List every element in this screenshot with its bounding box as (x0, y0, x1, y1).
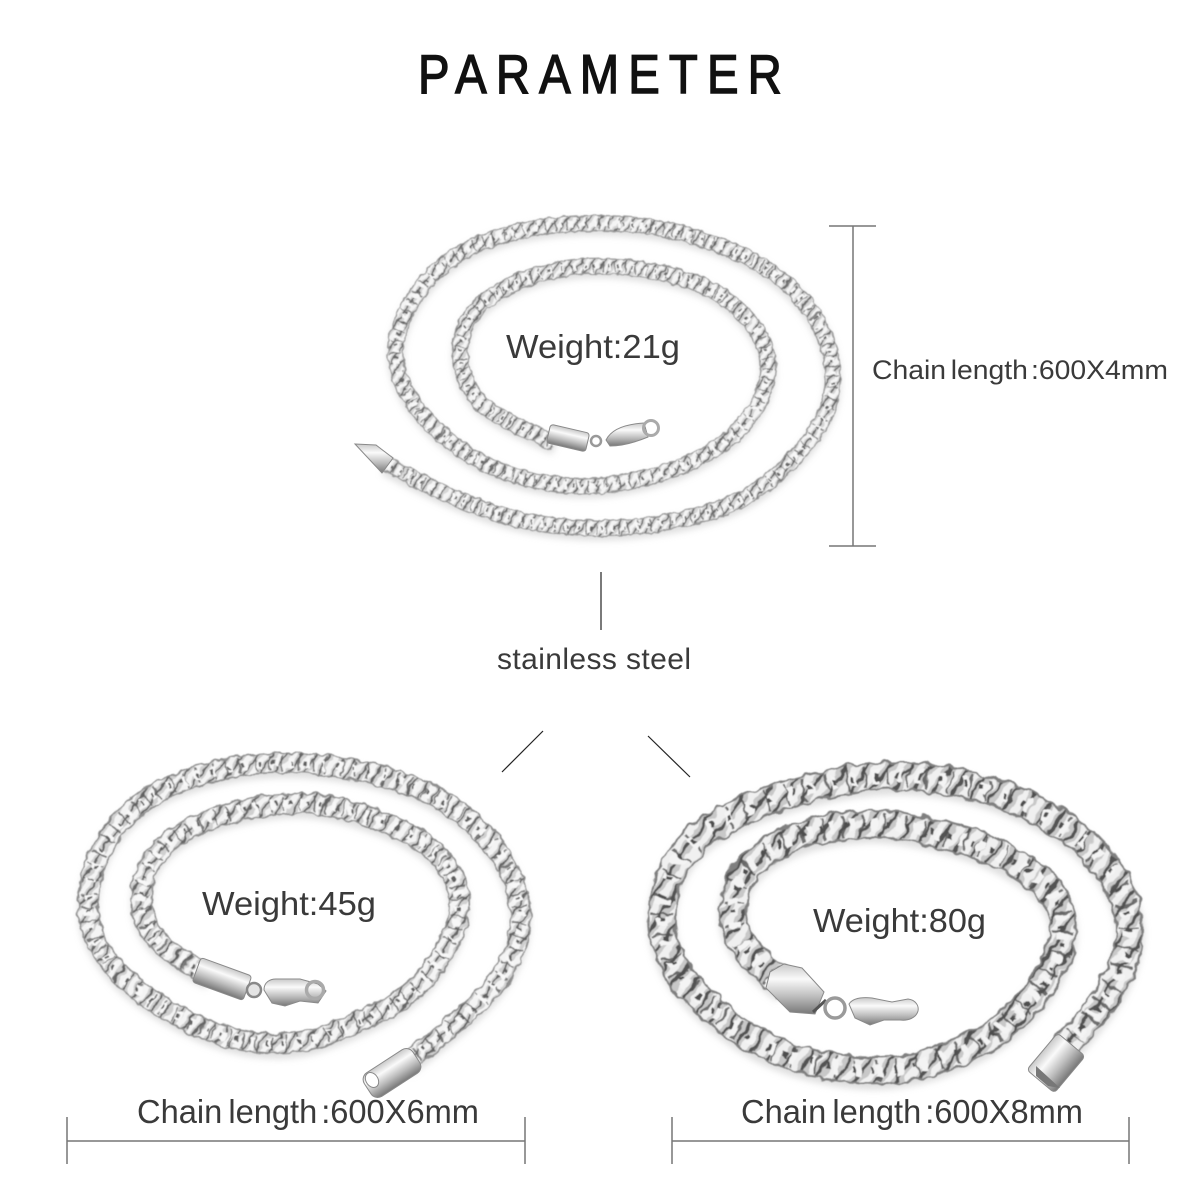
chain length label: 6mm: Chain length:600X6mm (137, 1093, 479, 1130)
material label: stainless steel (497, 643, 691, 676)
end cap: 4mm (355, 444, 393, 473)
dimension bracket: left horizontal (67, 1117, 525, 1164)
weight label: 45g: Weight:45g (202, 885, 376, 922)
chain: 8mm necklace (662, 776, 1130, 1093)
connector line: vertical (600, 572, 602, 630)
end cap: 6mm (360, 1045, 424, 1101)
weight label: 80g: Weight:80g (813, 902, 986, 939)
clasp: 6mm tube and lobster hook (192, 958, 326, 1006)
dimension bracket: right horizontal (672, 1117, 1129, 1164)
connector line: left diagonal (502, 731, 543, 772)
dimension bracket: vertical (829, 226, 876, 546)
end cap: 8mm (1027, 1033, 1085, 1093)
weight label: 21g: Weight:21g (506, 328, 680, 365)
chain: 4mm necklace (355, 223, 833, 532)
connector line: right diagonal (648, 736, 690, 777)
clasp: 8mm tube and lobster hook (766, 964, 918, 1025)
chain length label: 8mm: Chain length:600X8mm (741, 1093, 1083, 1130)
chain length label: 4mm: Chain length :600X4mm (872, 355, 1168, 385)
title: PARAMETER (418, 44, 782, 105)
chain: 6mm necklace (88, 763, 521, 1101)
clasp: 4mm tube and lobster hook (546, 420, 658, 452)
